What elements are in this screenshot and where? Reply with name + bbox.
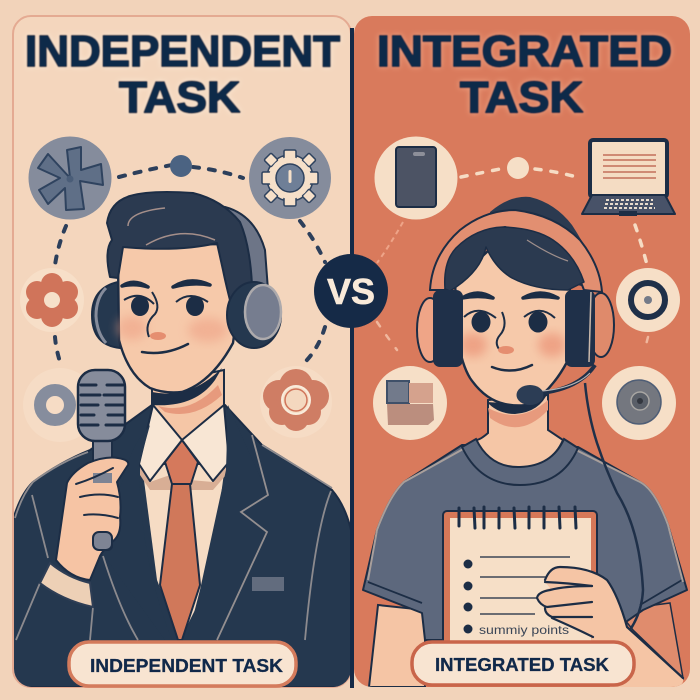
lapels <box>138 425 150 466</box>
person: independent speaker <box>13 192 351 687</box>
cheeks <box>117 316 147 340</box>
label: independent task: INDEPENDENT TASK <box>90 655 284 676</box>
label: integrated task <box>412 642 634 685</box>
eyebrows <box>462 293 558 298</box>
collar <box>462 439 578 485</box>
shirt <box>144 465 224 624</box>
icon: tablet <box>374 136 458 220</box>
icon: target <box>616 268 680 332</box>
headband <box>430 210 602 292</box>
icon: cream dot <box>507 157 529 179</box>
icon: dot <box>170 155 192 177</box>
left dashed connectors <box>55 165 325 365</box>
jacket seams <box>15 445 332 640</box>
right ear cup <box>227 282 281 348</box>
nose <box>497 312 505 349</box>
label: integrated task: INTEGRATED TASK <box>435 654 610 675</box>
headband <box>224 206 269 285</box>
right title: INTEGRATED <box>377 27 672 76</box>
collar <box>139 405 182 481</box>
right title <box>377 27 672 122</box>
icon: gear <box>249 137 331 219</box>
hand <box>56 458 128 580</box>
neck <box>152 370 224 442</box>
icon: orange rosette <box>260 366 332 438</box>
neck shadow <box>152 368 222 405</box>
left ear cup <box>92 282 120 348</box>
panel: integrated task <box>354 16 690 687</box>
hair <box>107 192 252 308</box>
neck <box>476 395 563 468</box>
left title <box>25 27 340 122</box>
headset mic <box>516 385 544 405</box>
face <box>455 235 570 406</box>
headset boom <box>542 365 595 393</box>
jacket <box>13 405 351 687</box>
right title: TASK <box>460 73 583 122</box>
hair <box>445 227 584 291</box>
right dashed connectors <box>461 168 647 265</box>
label: independent task <box>69 642 296 686</box>
lower dashed connectors <box>377 322 648 352</box>
hand <box>537 567 683 687</box>
pocket <box>252 577 284 591</box>
hair back <box>490 196 582 286</box>
cuff <box>40 563 93 607</box>
dark ear cups <box>433 290 463 367</box>
badge: VS: VS <box>327 271 375 312</box>
notebook caption: summiy points <box>479 623 569 637</box>
person: integrated speaker <box>363 197 687 687</box>
panel: independent task <box>13 16 351 687</box>
divider <box>350 28 354 688</box>
eyes <box>472 312 490 332</box>
mouth <box>142 344 188 353</box>
left title: TASK <box>119 73 240 122</box>
badge: VS <box>314 254 388 328</box>
arms <box>369 605 425 687</box>
t-shirt <box>363 445 687 640</box>
icon: speaker disc <box>602 366 676 440</box>
eyes <box>131 296 149 316</box>
notebook list <box>464 560 472 634</box>
icon: grey ring <box>23 368 97 442</box>
icon: folder blocks <box>373 366 447 440</box>
icon: fan <box>28 136 112 220</box>
cable <box>585 383 643 630</box>
outer ear pads <box>416 297 434 363</box>
left title: INDEPENDENT <box>25 27 340 76</box>
eyebrows <box>122 281 210 287</box>
tie <box>160 440 200 640</box>
microphone <box>78 370 125 550</box>
mouth <box>492 365 532 371</box>
cheeks <box>459 333 487 357</box>
notebook <box>443 507 597 651</box>
face <box>118 244 240 392</box>
icon: orange flower <box>20 268 84 332</box>
nose <box>147 292 157 337</box>
neck shadow <box>489 394 547 414</box>
icon: laptop <box>582 140 675 216</box>
notebook rings <box>459 507 576 528</box>
